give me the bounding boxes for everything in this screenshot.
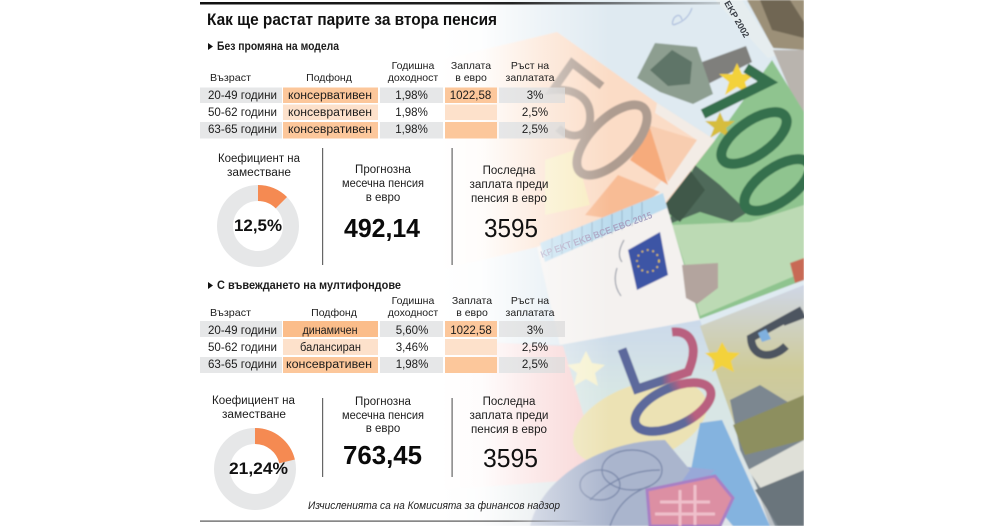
- stat: last salary before retirement: заплата преди: [470, 179, 548, 191]
- table one: [200, 60, 565, 138]
- table two: [200, 295, 565, 373]
- table two: 20-49 години: [208, 325, 277, 337]
- section two: with multifunds: [200, 280, 565, 502]
- table two: 1,98%: [396, 359, 428, 371]
- table two: 1022,58: [450, 325, 492, 337]
- table one: консевративен: [288, 124, 372, 136]
- table two: 3%: [527, 325, 543, 337]
- table one: Възраст: [210, 72, 251, 84]
- table one: доходност: [388, 72, 438, 84]
- table two: балансиран: [300, 342, 361, 354]
- dividers: [322, 148, 453, 265]
- stat: forecast monthly pension: 492,14: [344, 213, 421, 243]
- table two: Ръст на: [511, 295, 549, 307]
- stat: forecast monthly pension: в евро: [366, 192, 400, 204]
- donut: replacement rate 21,24%: [212, 395, 296, 502]
- stat: last salary before retirement: [470, 165, 548, 243]
- donut: replacement rate 21,24%: заместване: [222, 409, 286, 421]
- bottom rule: [200, 520, 585, 522]
- stat: last salary before retirement: 3595: [483, 443, 538, 473]
- stat: forecast monthly pension: 763,45: [343, 440, 422, 470]
- section one: without model change: [200, 41, 565, 265]
- stat: last salary before retirement: пенсия в евро: [471, 424, 547, 436]
- title: Как ще растат парите за втора пенсия: [207, 10, 497, 29]
- table two: доходност: [388, 307, 438, 319]
- stat: last salary before retirement: Последна: [483, 165, 536, 177]
- table one: 2,5%: [522, 107, 548, 119]
- table one: консевративен: [288, 107, 372, 119]
- donut: replacement rate 12,5%: Коефициент на: [218, 153, 301, 165]
- table one: 1022,58: [450, 90, 491, 102]
- donut: replacement rate 12,5%: 12,5%: [234, 216, 282, 235]
- source note: Изчисленията са на Комисията за финансов надзор: [308, 500, 560, 512]
- stat: forecast monthly pension: в евро: [366, 423, 400, 435]
- table two: динамичен: [302, 325, 358, 337]
- table one: Заплата: [451, 60, 491, 72]
- photo: euro banknotes: [492, 0, 804, 526]
- table two: Подфонд: [311, 307, 357, 319]
- stat: forecast monthly pension: Прогнозна: [355, 396, 412, 408]
- table two: 5,60%: [396, 325, 428, 337]
- stat: last salary before retirement: заплата преди: [470, 410, 548, 422]
- donut: replacement rate 12,5%: заместване: [227, 167, 291, 179]
- table one: заплатата: [506, 72, 555, 84]
- table one: 50-62 години: [208, 107, 277, 119]
- stat: forecast monthly pension: месечна пенсия: [342, 178, 424, 190]
- stat: last salary before retirement: пенсия в евро: [471, 193, 547, 205]
- stat: forecast monthly pension: [342, 396, 424, 470]
- donut: replacement rate 12,5%: [218, 153, 301, 259]
- table two: 63-65 години: [208, 359, 277, 371]
- table two: 50-62 години: [208, 342, 277, 354]
- table two: Заплата: [452, 295, 492, 307]
- table one: Годишна: [392, 60, 434, 72]
- stat: forecast monthly pension: [342, 164, 424, 243]
- donut: replacement rate 21,24%: 21,24%: [229, 459, 288, 478]
- section heading one: Без промяна на модела: [217, 41, 340, 53]
- table two: заплатата: [506, 307, 555, 319]
- table one: в евро: [455, 72, 487, 84]
- table one: 1,98%: [395, 107, 428, 119]
- banknote lettering: [539, 0, 751, 261]
- table one: 3%: [527, 90, 543, 102]
- table one: 1,98%: [395, 90, 428, 102]
- lettering: 100 note: EKP 2002: [722, 0, 751, 39]
- table two: 3,46%: [396, 342, 428, 354]
- table two: в евро: [456, 307, 488, 319]
- top rule: [200, 2, 720, 4]
- table one: 20-49 години: [208, 90, 277, 102]
- table one: Подфонд: [306, 72, 352, 84]
- table two: 2,5%: [522, 342, 548, 354]
- table one: 63-65 години: [208, 124, 277, 136]
- table two: Годишна: [392, 295, 434, 307]
- table one: Ръст на: [511, 60, 549, 72]
- stat: last salary before retirement: 3595: [484, 213, 538, 243]
- donut: replacement rate 21,24%: Коефициент на: [212, 395, 296, 407]
- dividers: [322, 398, 453, 477]
- table two: 2,5%: [522, 359, 548, 371]
- lettering: 50 note: KP EKT EKB BCE EBC 2015: [539, 210, 655, 261]
- stat: forecast monthly pension: Прогнозна: [355, 164, 412, 176]
- fade of the photo into the white panel: [440, 0, 610, 526]
- stat: last salary before retirement: [470, 396, 548, 473]
- table one: 2,5%: [522, 124, 548, 136]
- table two: консевративен: [286, 359, 372, 371]
- table one: 1,98%: [395, 124, 428, 136]
- section heading two: С въвеждането на мултифондове: [217, 280, 401, 292]
- stat: forecast monthly pension: месечна пенсия: [342, 410, 424, 422]
- table two: Възраст: [210, 307, 251, 319]
- table one: консервативен: [288, 90, 372, 102]
- stat: last salary before retirement: Последна: [483, 396, 536, 408]
